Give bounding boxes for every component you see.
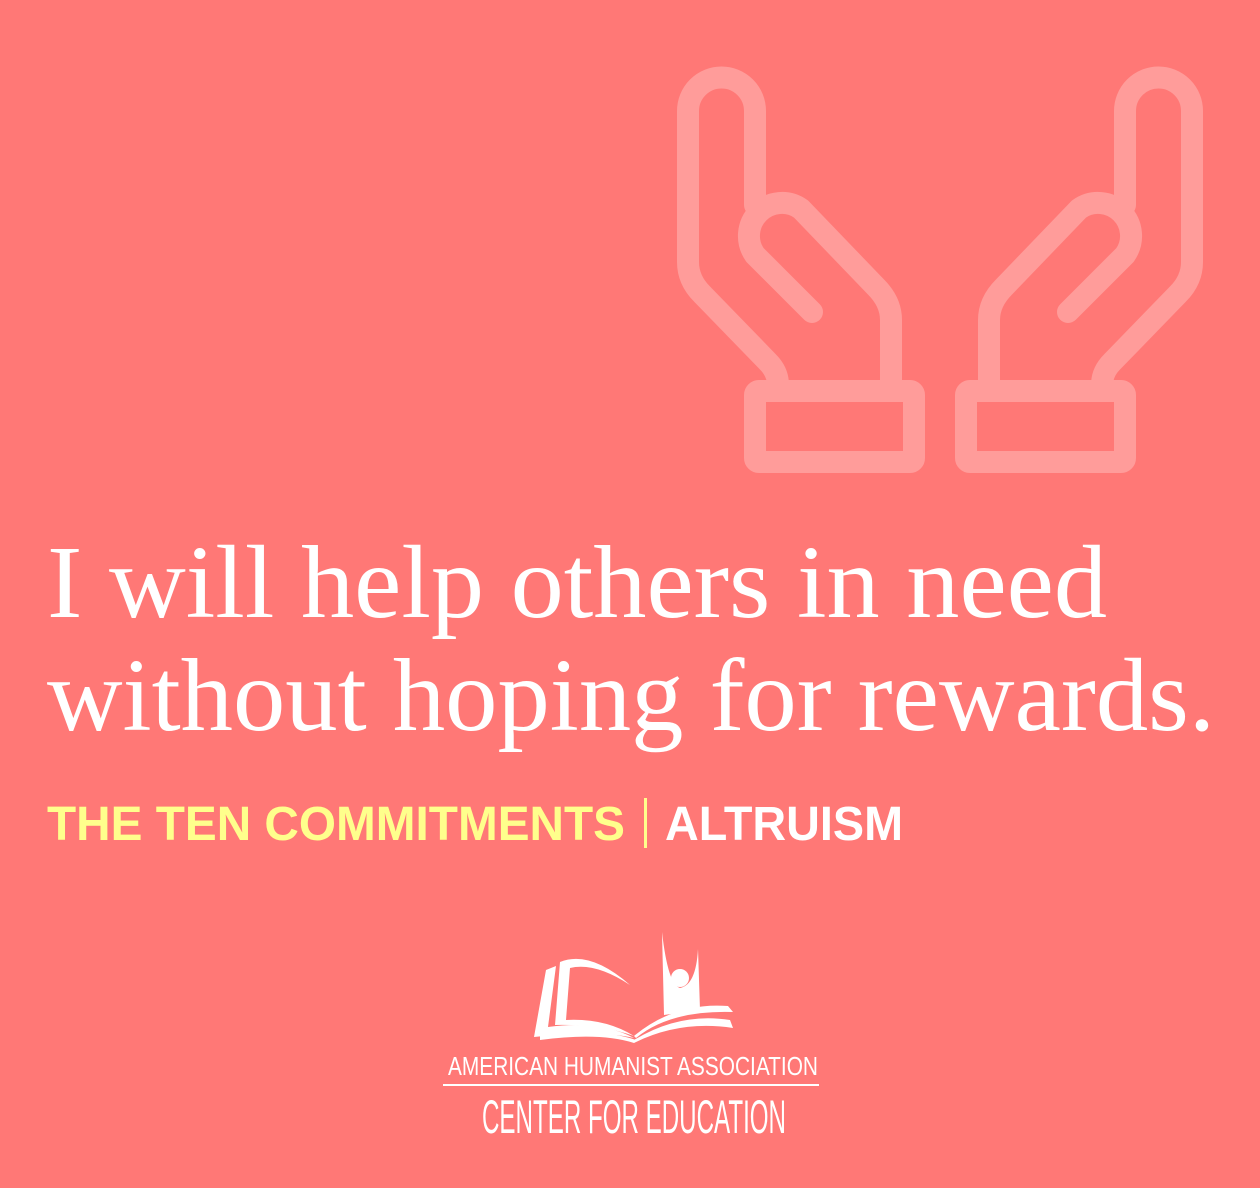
logo: AHA Center for Education [443,932,819,1143]
text: American Humanist Association: AMERICAN HUMANIST ASSOCIATION [448,1051,818,1081]
subtitle: the ten commitments | altruism: THE TEN COMMITMENTS [47,798,625,851]
icon: open hands [688,77,1192,462]
subtitle: the ten commitments | altruism [47,798,903,851]
text: Center for Education: CENTER FOR EDUCATION [482,1090,786,1143]
icon: left hand [688,77,914,462]
heading: commitment quote: without hoping for rewards. [47,638,1215,753]
icon: right hand [966,77,1192,462]
icon: open book with figure [534,932,733,1043]
heading: commitment quote [47,525,1215,753]
heading: commitment quote: I will help others in need [47,525,1107,640]
subtitle: the ten commitments | altruism: ALTRUISM [665,798,903,851]
